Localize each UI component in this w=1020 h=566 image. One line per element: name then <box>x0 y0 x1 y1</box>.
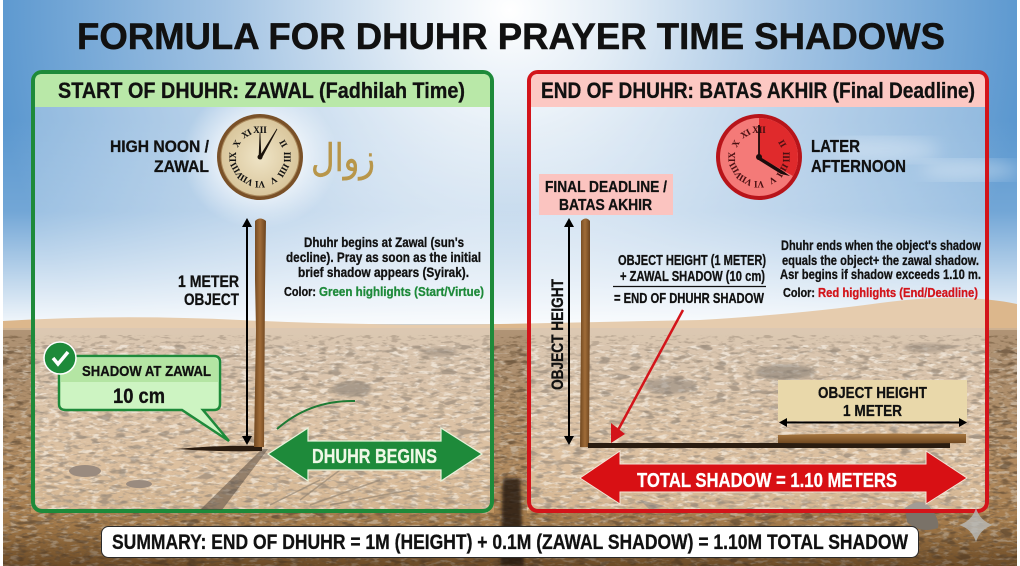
icon: noon clock: VI <box>255 179 265 189</box>
text block: formula: + ZAWAL SHADOW (10 cm) <box>620 269 765 285</box>
Arabic word: Zawal: زوال <box>311 136 375 181</box>
text block: start explanation: Dhuhr begins at Zawal (sun's <box>304 235 464 250</box>
label: final deadline <box>539 174 673 215</box>
label: object height 1 meter: OBJECT HEIGHT <box>818 385 927 402</box>
label: high noon: HIGH NOON / <box>110 137 209 156</box>
icon: afternoon clock: IX <box>727 152 737 162</box>
icon: noon clock: VIII <box>228 160 245 180</box>
arrow: total shadow <box>580 451 967 504</box>
icon: noon clock: V <box>268 174 279 187</box>
text block: start explanation: brief shadow appears (Syirak). <box>298 265 469 280</box>
summary bar <box>102 526 918 558</box>
object: wooden pole <box>254 218 266 447</box>
icon: afternoon clock: XII <box>752 125 766 135</box>
panel: start of Dhuhr <box>33 72 492 511</box>
label: 1 meter object <box>178 272 239 309</box>
icon: afternoon clock: II <box>776 138 789 149</box>
callout: shadow at zawal: SHADOW AT ZAWAL <box>82 363 211 380</box>
arrow: 1 meter span <box>779 418 967 427</box>
arrow: object height <box>242 218 252 445</box>
label: final deadline: FINAL DEADLINE / <box>545 179 667 196</box>
object: wooden pole right <box>580 218 590 447</box>
icon: afternoon clock: V <box>767 174 778 187</box>
panel header: start <box>35 74 490 107</box>
label: later afternoon <box>811 136 906 176</box>
icon: noon clock: X <box>231 138 243 149</box>
label: high noon <box>110 137 209 176</box>
rock <box>905 502 938 530</box>
text block: end explanation: Color: <box>783 285 815 300</box>
shadow at zawal <box>176 446 268 510</box>
callout: shadow at zawal <box>44 342 229 441</box>
arrow: total shadow: TOTAL SHADOW = 1.10 METERS <box>637 469 897 492</box>
text block: formula <box>613 253 766 307</box>
icon: afternoon clock: X <box>730 138 742 149</box>
panel header: start: START OF DHUHR: ZAWAL (Fadhilah Time) <box>58 78 465 103</box>
arrow: Dhuhr begins: DHUHR BEGINS <box>312 446 437 468</box>
text block: formula: OBJECT HEIGHT (1 METER) <box>618 253 766 269</box>
icon: afternoon clock: III <box>781 152 791 163</box>
title: FORMULA FOR DHUHR PRAYER TIME SHADOWS <box>77 16 945 57</box>
panel: end of Dhuhr <box>529 72 987 511</box>
icon: noon clock: XII <box>253 125 267 135</box>
scrub <box>332 382 372 396</box>
label: object height 1 meter <box>778 380 967 421</box>
label: high noon: ZAWAL <box>154 157 209 176</box>
label: 1 meter object: 1 METER <box>178 272 239 291</box>
label: object height 1 meter: 1 METER <box>843 403 902 420</box>
label: later afternoon: AFTERNOON <box>811 156 906 176</box>
icon: afternoon clock: XI <box>739 127 753 140</box>
label: later afternoon: LATER <box>811 136 860 156</box>
icon: afternoon clock: VII <box>737 172 754 188</box>
icon: noon clock: II <box>277 138 290 149</box>
text block: end explanation: Asr begins if shadow exceeds 1.10 m. <box>780 267 981 282</box>
callout: shadow at zawal: 10 cm <box>113 385 165 408</box>
curved shadow marker <box>277 401 355 429</box>
label: 1 meter object: OBJECT <box>184 290 239 309</box>
text block: end explanation: Dhuhr ends when the object's shadow <box>781 238 981 253</box>
label: final deadline: BATAS AKHIR <box>559 197 652 214</box>
icon: noon clock: XI <box>240 127 254 140</box>
long shadow on the ground <box>588 443 950 448</box>
text block: start explanation: Green highlights (Start/Virtue) <box>319 284 484 299</box>
icon: check mark <box>44 342 76 374</box>
text block: formula: = END OF DHUHR SHADOW <box>614 291 764 307</box>
icon: afternoon clock: VIII <box>727 160 744 180</box>
icon: noon clock: IIII <box>275 162 291 179</box>
icon: sparkle watermark <box>959 508 993 542</box>
icon: afternoon clock <box>716 114 802 200</box>
text block: end explanation <box>780 238 981 300</box>
vertical label: object height: OBJECT HEIGHT <box>549 279 567 390</box>
icon: noon clock: IX <box>228 152 238 162</box>
arrow: formula pointer <box>611 310 683 443</box>
object: laid-down pole <box>778 434 966 444</box>
icon: afternoon clock: VI <box>754 179 764 189</box>
icon: noon clock: III <box>282 152 292 163</box>
text block: start explanation: decline). Pray as soon as the initial <box>286 250 481 265</box>
text block: start explanation: Color: <box>284 284 316 299</box>
icon: afternoon clock: IIII <box>774 162 790 179</box>
text block: start explanation <box>284 235 484 299</box>
text block: end explanation: equals the object+ the zawal shadow. <box>782 253 979 268</box>
arrow: object height right <box>564 218 574 445</box>
icon: noon clock: VII <box>238 172 255 188</box>
arrow: Dhuhr begins <box>268 428 482 481</box>
text block: end explanation: Red highlights (End/Deadline) <box>818 285 978 300</box>
icon: noon clock <box>217 114 303 200</box>
